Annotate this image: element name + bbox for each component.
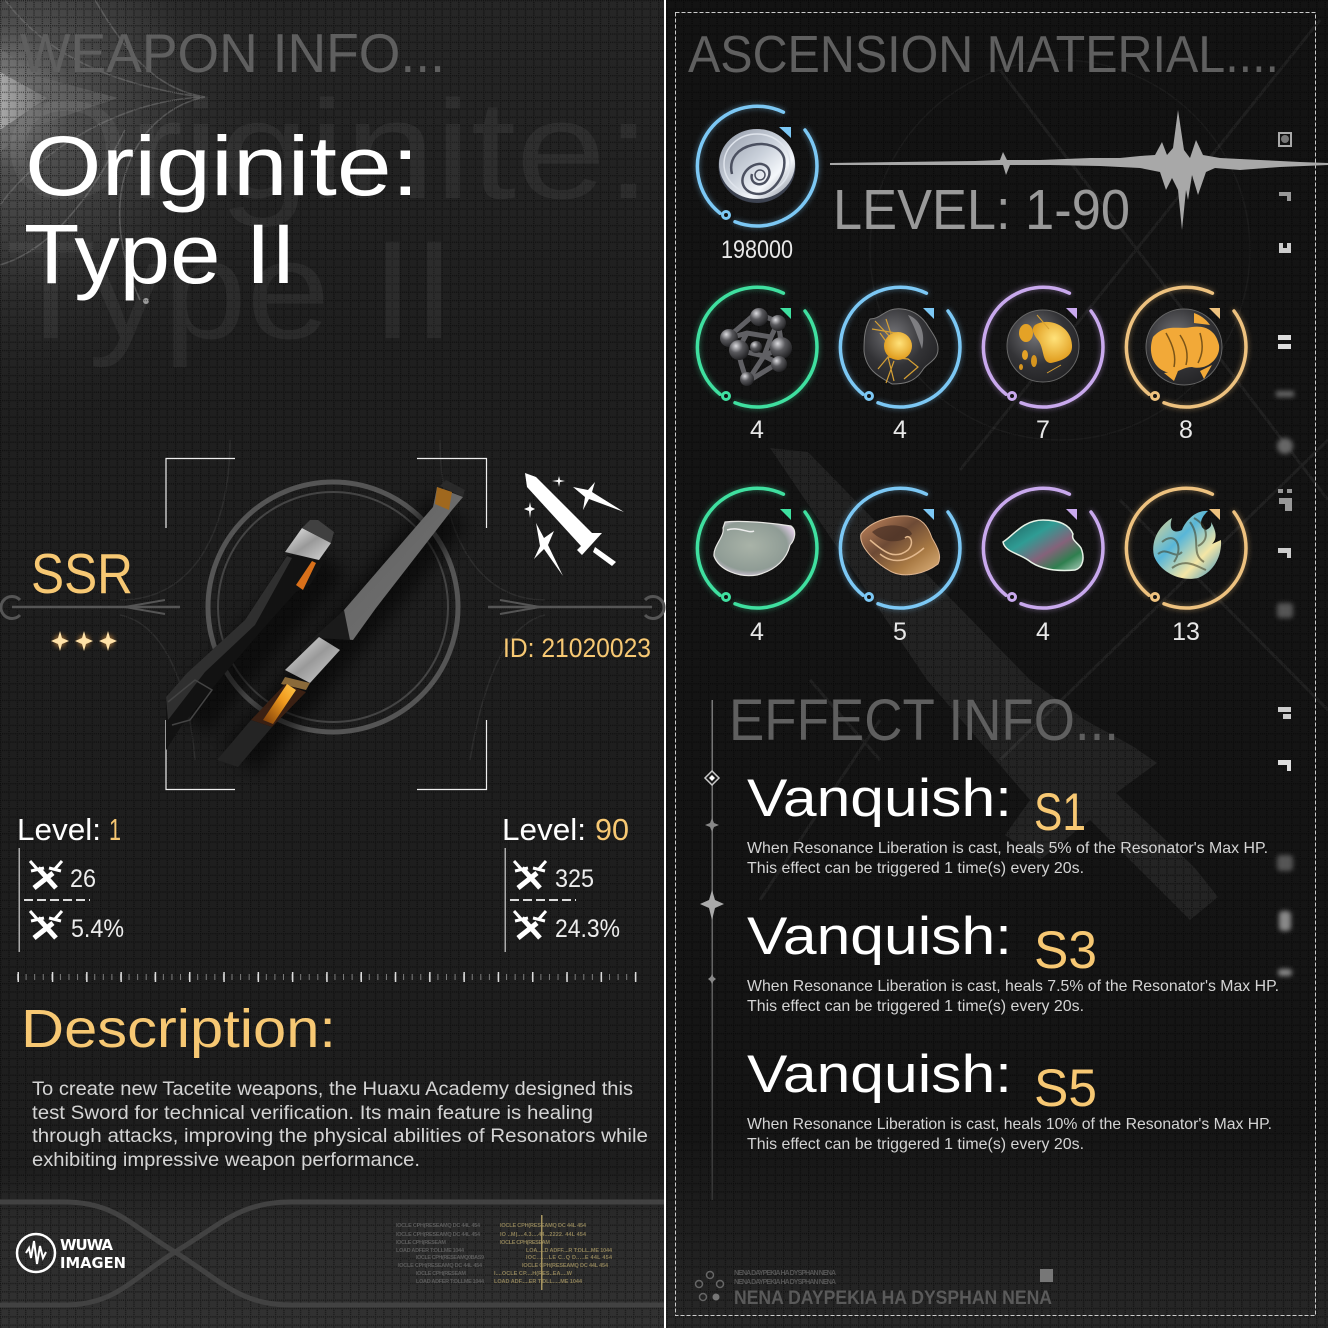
amount: 7 <box>1036 416 1050 444</box>
weapon id: ID: 21020023 <box>503 633 651 663</box>
weapon title: Type II <box>24 207 296 301</box>
code block footer: I....OCLE CP....H(RES..EA....W <box>494 1271 573 1277</box>
effect: S3: S3 <box>1034 921 1097 980</box>
amount: 4 <box>750 618 764 646</box>
amount: 8 <box>1179 416 1193 444</box>
white gutter between panels <box>664 0 666 1328</box>
weapon illustration: back sword <box>166 520 334 750</box>
icon: crit <box>30 911 62 938</box>
code block footer: LOA...LD ADFF....R T:DLL..ME 1044 <box>526 1248 613 1254</box>
panel: weapon info background <box>0 0 664 1328</box>
effect: S3: When Resonance Liberation is cast, heals 7.5% of the Resonator's Max HP. <box>747 978 1279 995</box>
material: flame crystal <box>1126 488 1246 608</box>
footer glyph band <box>696 1269 1053 1309</box>
material: bronze shell <box>840 488 960 608</box>
amount: credits: 198000 <box>721 236 793 264</box>
material: iridescent shell <box>983 488 1103 608</box>
weapon title: Originite: <box>25 119 419 213</box>
ghost title: Originite: <box>3 71 651 228</box>
stats: level 1: 5.4% <box>71 915 124 943</box>
code block footer: IOCLE CPH(RESEAMQ DC 44L 454 <box>500 1223 587 1229</box>
amount: 5 <box>893 618 907 646</box>
level range: LEVEL: 1-90 <box>833 178 1130 242</box>
weapon title <box>24 119 419 301</box>
amount: 4 <box>750 416 764 444</box>
description text: test Sword for technical verification. Its main feature is healing <box>32 1103 593 1124</box>
icon: crit <box>514 911 546 938</box>
effect: S5: S5 <box>1034 1059 1097 1118</box>
heading: ascension material: ASCENSION MATERIAL.... <box>688 26 1279 84</box>
code block footer: IOCLE CPH(RESEAMQ DC 44L 454 <box>522 1263 609 1269</box>
logo: wuwa imagen: IMAGEN <box>60 1254 126 1272</box>
ghost title: Type II <box>5 211 455 368</box>
footer glyph band: NENA DAYPEKIA HA DYSPHAN NENA <box>734 1279 836 1286</box>
footer glyph band: NENA DAYPEKIA HA DYSPHAN NENA <box>734 1270 836 1277</box>
frame corners <box>166 458 486 790</box>
stats: level 1: Level: <box>17 812 101 847</box>
code block footer: IOCLE CPH(RESEAMQ DC 44L 454 <box>398 1263 483 1269</box>
material: gold core blob <box>840 287 960 407</box>
weapon shadow <box>190 510 450 760</box>
side divider: right <box>488 596 664 618</box>
effect: S3: This effect can be triggered 1 time(s) every 20s. <box>747 998 1084 1015</box>
effect: S5: Vanquish: <box>747 1045 1012 1104</box>
code block footer: IOCLE CPH(RESEAM <box>416 1271 466 1277</box>
code block footer: IOCLE CPH(RESEAM <box>396 1240 446 1246</box>
code block footer: IO ..M|....4.3....44...2222. 44L 454 <box>500 1232 587 1238</box>
logo: wuwa imagen: WUWA <box>60 1236 113 1254</box>
stats: level 1: 1 <box>109 812 121 847</box>
rarity stars <box>51 631 117 651</box>
code block footer: IOCLE CPH(RESEAMQ DC 44L 454 <box>396 1232 481 1238</box>
code block footer: LOAD ADFER T:DLLME 1044 <box>416 1279 485 1285</box>
code block footer <box>396 1215 613 1290</box>
ruler <box>17 974 637 980</box>
ghost title <box>3 71 651 368</box>
effect: S5 <box>747 1045 1272 1153</box>
logo: wuwa imagen <box>17 1234 126 1272</box>
rarity: SSR: SSR <box>31 542 133 606</box>
effect: S3 <box>747 907 1279 1015</box>
icon: sword class <box>524 473 624 576</box>
effect: S3: Vanquish: <box>747 907 1012 966</box>
stats: level 90 <box>502 812 629 952</box>
footer ribbons <box>0 1202 664 1305</box>
material: dark molecule <box>697 287 817 407</box>
timeline rail <box>700 700 724 1200</box>
stats: level 1 <box>17 812 124 952</box>
effect: S1: This effect can be triggered 1 time(s) every 20s. <box>747 860 1084 877</box>
stats: level 1: 26 <box>70 865 96 893</box>
material: shell credit <box>697 106 817 226</box>
code block footer: IOCLE CPH(RESEAMQ DC 44L 454 <box>396 1223 481 1229</box>
stats: level 90: 90 <box>595 812 629 847</box>
amount: 13 <box>1172 618 1200 646</box>
waveform <box>830 110 1328 230</box>
side glyph column <box>1276 133 1294 976</box>
code block footer: IOCLE CPH(RESEAMQ0BAS9 <box>416 1255 484 1261</box>
amount: 4 <box>1036 618 1050 646</box>
effect: S5: When Resonance Liberation is cast, heals 10% of the Resonator's Max HP. <box>747 1116 1272 1133</box>
code block footer: IOCLE CPH(RESEAM <box>500 1240 550 1246</box>
icon: attack <box>514 861 546 888</box>
effect: S1 <box>747 769 1268 877</box>
effect: S1: Vanquish: <box>747 769 1012 828</box>
code block footer: IOC.......LE C..Q D.....E 44L 454 <box>526 1255 613 1261</box>
effect: S5: This effect can be triggered 1 time(s) every 20s. <box>747 1136 1084 1153</box>
description text: exhibiting impressive weapon performance. <box>32 1150 420 1171</box>
heading: weapon info: WEAPON INFO... <box>20 22 445 84</box>
panel: ascension background <box>666 0 1328 1328</box>
code block footer: LOAD ADF.....ER T:DLL.....ME 1044 <box>494 1279 583 1285</box>
stats: level 90: Level: <box>502 812 586 847</box>
material: gold shell orb <box>1126 287 1246 407</box>
weapon illustration: front sword <box>217 480 465 767</box>
description text: through attacks, improving the physical abilities of Resonators while <box>32 1126 648 1147</box>
code block footer: LOAD ADFER T:DLLME 1044 <box>396 1248 465 1254</box>
effect: S1: When Resonance Liberation is cast, heals 5% of the Resonator's Max HP. <box>747 840 1268 857</box>
heading: description: Description: <box>21 999 336 1059</box>
weapon emblem circle <box>208 482 458 732</box>
icon: attack <box>30 861 62 888</box>
stats: level 90: 24.3% <box>555 915 620 943</box>
heading: effect info: EFFECT INFO... <box>729 688 1119 753</box>
dashed frame <box>676 12 1316 1316</box>
effect: S1: S1 <box>1034 783 1086 842</box>
footer glyph band: NENA DAYPEKIA HA DYSPHAN NENA <box>734 1288 1052 1309</box>
stats: level 90: 325 <box>555 865 594 893</box>
material: gold veined orb <box>983 287 1103 407</box>
amount: 4 <box>893 416 907 444</box>
description text: To create new Tacetite weapons, the Huaxu Academy designed this <box>32 1079 633 1100</box>
description text <box>32 1079 648 1171</box>
side divider: left <box>1 596 180 618</box>
material: pearl shell <box>697 488 817 608</box>
